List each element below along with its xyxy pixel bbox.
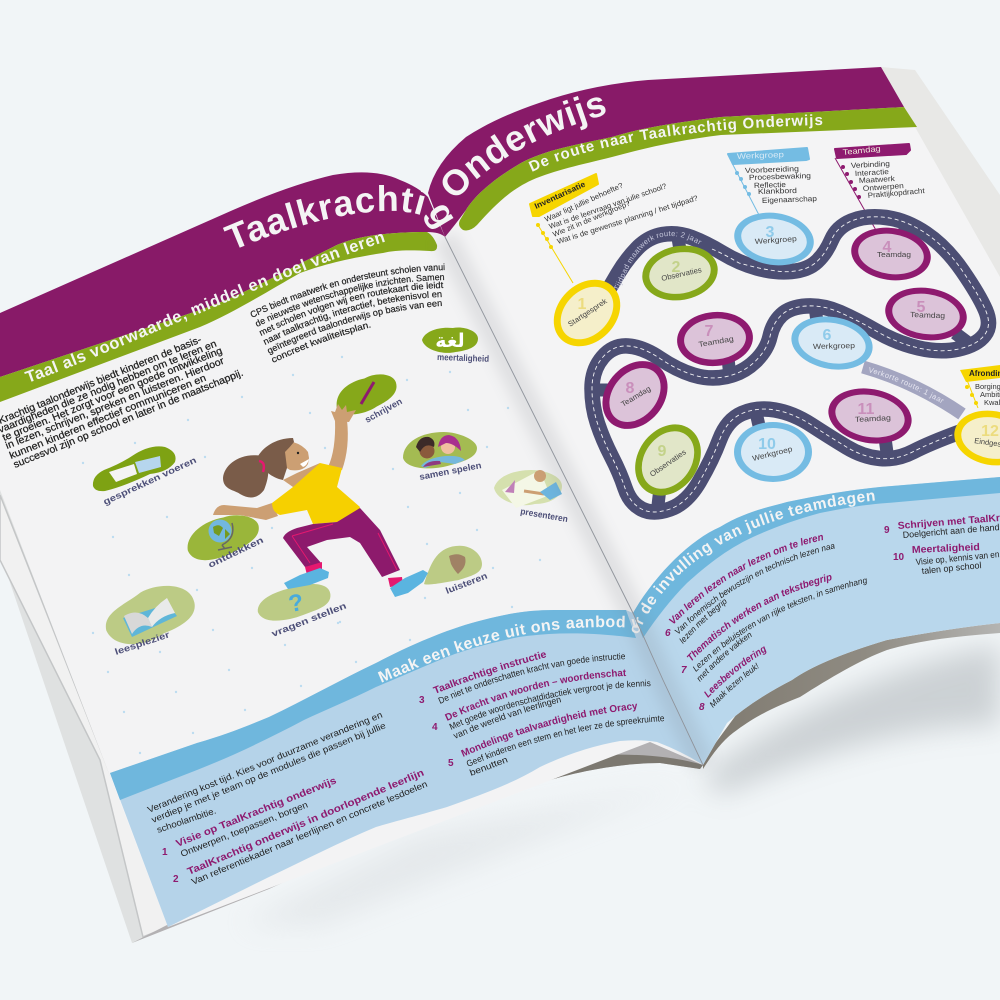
icon: luisteren ear [424, 546, 482, 585]
step 1: Startgesprek [566, 296, 609, 329]
right panel text: Doelgericht aan de hand [902, 522, 1000, 540]
icon: gesprekken voeren [93, 446, 176, 491]
left blue band [110, 610, 636, 800]
left panel text: Van referentiekader naar leerlijnen en concrete lesdoelen [190, 779, 429, 887]
step 4: Teamdag [877, 250, 911, 259]
right panel text: 9 [884, 525, 890, 536]
step 2: Observaties [660, 265, 703, 283]
callout: Inventarisatie [530, 174, 699, 283]
right column intro text: geïntegreerd taalonderwijs op basis van een [268, 301, 442, 355]
step 5: Teamdag [910, 310, 945, 320]
left page [0, 172, 703, 927]
callout: Werkgroep: Klankbord [758, 186, 797, 196]
label: samen spelen: samen spelen [418, 460, 482, 482]
right panel text: Maak lezen leuk! [710, 662, 759, 708]
callout: Afronding [960, 365, 1000, 408]
icon: meertaligheid: لغة [435, 330, 465, 352]
label: ontdekken: ontdekken [207, 535, 265, 570]
callout: Teamdag: Verbinding [851, 159, 890, 170]
right panel text: lezen met begrip [679, 599, 726, 644]
left panel text: 2 [173, 874, 179, 885]
left intro text: vaardigheden die ze nodig hebben om te leren en [0, 339, 218, 436]
right panel text: 10 [893, 552, 905, 563]
step 6: Werkgroep [813, 341, 855, 351]
page stack left [132, 738, 703, 943]
icon: leesplezier book [100, 580, 200, 650]
right column intro text: concreet kwaliteitsplan. [272, 324, 371, 362]
step 7 [675, 309, 755, 369]
callout: Werkgroep: Procesbewaking [749, 171, 811, 182]
left panel text: schoolambitie. [155, 806, 217, 835]
left panel text: Mondelinge taalvaardigheid met Oracy [460, 704, 638, 757]
step 7: 7 [705, 323, 714, 340]
step 7: Teamdag [698, 334, 734, 349]
left panel text: 3 [419, 695, 425, 706]
step 1 [540, 266, 634, 360]
callout: Inventarisatie: Wat is de gewenste planning / het tijdpad? [556, 193, 699, 246]
callout: Inventarisatie: Wat is de leervraag van julie school? [548, 181, 668, 231]
spine line [445, 237, 703, 765]
right panel text: Lezen en beluisteren van rijke teksten, in samenhang [692, 578, 867, 672]
left panel text: TaalKrachtig onderwijs in doorlopende leerlijn [186, 768, 426, 878]
right panel text: met andere vakken [698, 632, 752, 682]
right panel text [665, 511, 1000, 713]
left panel text: verdiep je met je team op de modules die passen bij jullie [150, 720, 387, 825]
step 11: Teamdag [855, 413, 891, 424]
page stack left dark edge [447, 755, 703, 816]
step 12 [950, 405, 1000, 471]
right panel text: Thematisch werken aan tekstbegrip [686, 574, 832, 661]
right page [428, 67, 1000, 765]
shadow under the book [240, 645, 1000, 925]
step 6: 6 [823, 327, 832, 344]
right blue panel [633, 477, 1000, 765]
label: vragen stellen: vragen stellen [270, 601, 348, 639]
left decorative dots [82, 356, 541, 754]
right column intro text: met scholen volgen wij een routekaart die leidt [259, 282, 444, 336]
right column intro text: naar taalkrachtig, interactief, betekenisvol en [263, 291, 442, 345]
left intro text [0, 335, 245, 471]
callout: Inventarisatie: Wie zit in de werkgroep? [551, 199, 631, 239]
left panel text: Taalkrachtige instructie [432, 652, 546, 694]
label: gesprekken voeren: gesprekken voeren [102, 455, 198, 507]
step 2: 2 [672, 259, 681, 276]
icon: vragen stellen [255, 582, 333, 623]
route road: Tijdpad maatwerk route: 2 jaar [614, 231, 702, 290]
title: Onderwijs: Onderwijs [442, 96, 606, 196]
heading: Maak een keuze: Maak een keuze uit ons aanbod vo [378, 616, 638, 682]
outer cover edge [0, 480, 175, 943]
left blue panel [110, 610, 703, 927]
right panel text: Meertaligheid [912, 542, 980, 556]
route road [584, 209, 996, 520]
callout: Teamdag: Interactie [855, 167, 889, 178]
step 5: 5 [917, 299, 926, 316]
shortened route [861, 361, 966, 420]
label: luisteren: luisteren [444, 571, 489, 596]
left panel text: Met goede woordenschatdidactiek vergroot je de kennis [449, 680, 651, 730]
step 1: 1 [578, 296, 587, 313]
callout: Werkgroep: Eigenaarschap [762, 194, 817, 205]
right column intro text: de nieuwste wetenschappelijke inzichten. Samen [256, 274, 444, 326]
left panel text: De niet te onderschatten kracht van goede instructie [438, 652, 625, 704]
step 10 [734, 422, 812, 482]
right panel text: 6 [665, 628, 671, 639]
right column intro text: CPS biedt maatwerk en ondersteunt scholen vanuit [250, 263, 445, 318]
label: presenteren: presenteren [520, 506, 569, 524]
left intro text: kunnen kinderen effectief communiceren en [8, 373, 208, 462]
right panel text: 8 [699, 702, 705, 713]
right panel text: Van leren lezen naar lezen om te leren [668, 534, 823, 624]
left panel text: Geef kinderen een stem en het leer ze de spreekruimte [466, 716, 664, 766]
icon: schrijven [331, 369, 402, 420]
right green banner [459, 107, 917, 230]
inner cover strip [0, 495, 170, 937]
left intro text: Krachtig taalonderwijs biedt kinderen de basis- [0, 335, 203, 427]
left intro text: in lezen, schrijven, spreken en luisteren. Hierdoor [4, 356, 226, 452]
step 9: Observaties [648, 447, 688, 479]
step 8: 8 [626, 380, 635, 397]
callout: Werkgroep: Werkgroep [737, 150, 785, 161]
left panel text: 1 [162, 847, 168, 858]
right panel text: Van fonemisch bewustzijn en technisch lezen naar [674, 544, 835, 634]
heading: De route: De route naar Taalkrachtig Onderwijs [528, 114, 822, 172]
step 2 [638, 240, 722, 306]
title: Taalkrachtig: Taalkrachtig [223, 185, 454, 248]
step 8 [589, 348, 681, 442]
callout: Teamdag: Teamdag [842, 144, 881, 157]
left panel text: van de wereld van leerlingen [453, 698, 561, 738]
step 11: 11 [858, 401, 875, 418]
label: leesplezier: leesplezier [113, 629, 171, 657]
heading: Taal als voorwaarde: Taal als voorwaarde, middel en doel van leren [24, 234, 385, 382]
step 3: Werkgroep [755, 234, 797, 246]
left purple banner [0, 172, 445, 377]
icon: ontdekken globe [183, 511, 263, 563]
page stack right [703, 615, 1000, 769]
icon: meertaligheid [422, 327, 478, 353]
step 3 [731, 208, 817, 270]
right panel text: Leesbevordering [704, 646, 766, 698]
right panel text: 7 [681, 665, 687, 676]
label: meertaligheid: meertaligheid [437, 352, 489, 364]
right column intro text [250, 263, 445, 362]
left intro text: succesvol zijn op school en later in de maatschappij. [12, 368, 245, 471]
callout: Werkgroep: Reflectie [754, 180, 786, 190]
left panel text: benutten [468, 754, 509, 778]
heading: de invulling: or de invulling van jullie teamdagen [632, 492, 875, 634]
icon: vragen stellen: ? [287, 589, 306, 618]
callout: Inventarisatie: Waar ligt jullie behoefte? [543, 181, 624, 224]
left panel text: 4 [432, 722, 438, 733]
left panel text [146, 652, 664, 887]
left panel text: De Kracht van woorden – woordenschat [444, 669, 626, 721]
step 8: Teamdag [619, 384, 652, 409]
callout: Teamdag: Ontwerpen [862, 181, 904, 193]
step 4: 4 [883, 239, 892, 256]
left panel text: Verandering kost tijd. Kies voor duurzame verandering en [146, 710, 384, 815]
left green banner [0, 232, 437, 402]
step 9 [622, 412, 714, 508]
callout: Teamdag: Praktijkopdracht [867, 186, 926, 200]
step 6 [787, 310, 877, 376]
icon: samen spelen [403, 432, 477, 468]
spine shading [445, 237, 703, 765]
callout: Inventarisatie: Inventarisatie [533, 179, 587, 211]
left intro text: te groeien. Het zorgt voor een goede ontwikkeling [1, 346, 224, 444]
callout: Werkgroep [728, 148, 817, 215]
label: schrijven: schrijven [363, 396, 404, 425]
step 10: Werkgroep [751, 444, 793, 463]
callout: Teamdag [835, 144, 926, 232]
icon: presenteren [494, 470, 562, 508]
step 12: 12 [981, 423, 999, 440]
left panel text: Ontwerpen, toepassen, borgen [179, 799, 309, 859]
callout: Werkgroep: Voorbereiding [745, 164, 799, 175]
shortened route: Verkorte route: 1 jaar [870, 367, 944, 403]
left panel text: Visie op TaalKrachtig onderwijs [175, 775, 339, 850]
back cover behind right page [881, 67, 1000, 300]
illustration: climbing girl [213, 404, 428, 597]
step 11 [824, 382, 916, 450]
step 3: 3 [766, 224, 775, 241]
step 10: 10 [758, 436, 776, 453]
right blue band [633, 477, 1000, 638]
right panel text: talen op school [921, 560, 982, 576]
callout: Teamdag: Maatwerk [859, 174, 895, 185]
left panel text: 5 [448, 758, 454, 769]
step 4 [848, 223, 934, 285]
step 5 [882, 283, 970, 345]
right purple banner [428, 67, 904, 237]
step 9: 9 [658, 443, 667, 460]
